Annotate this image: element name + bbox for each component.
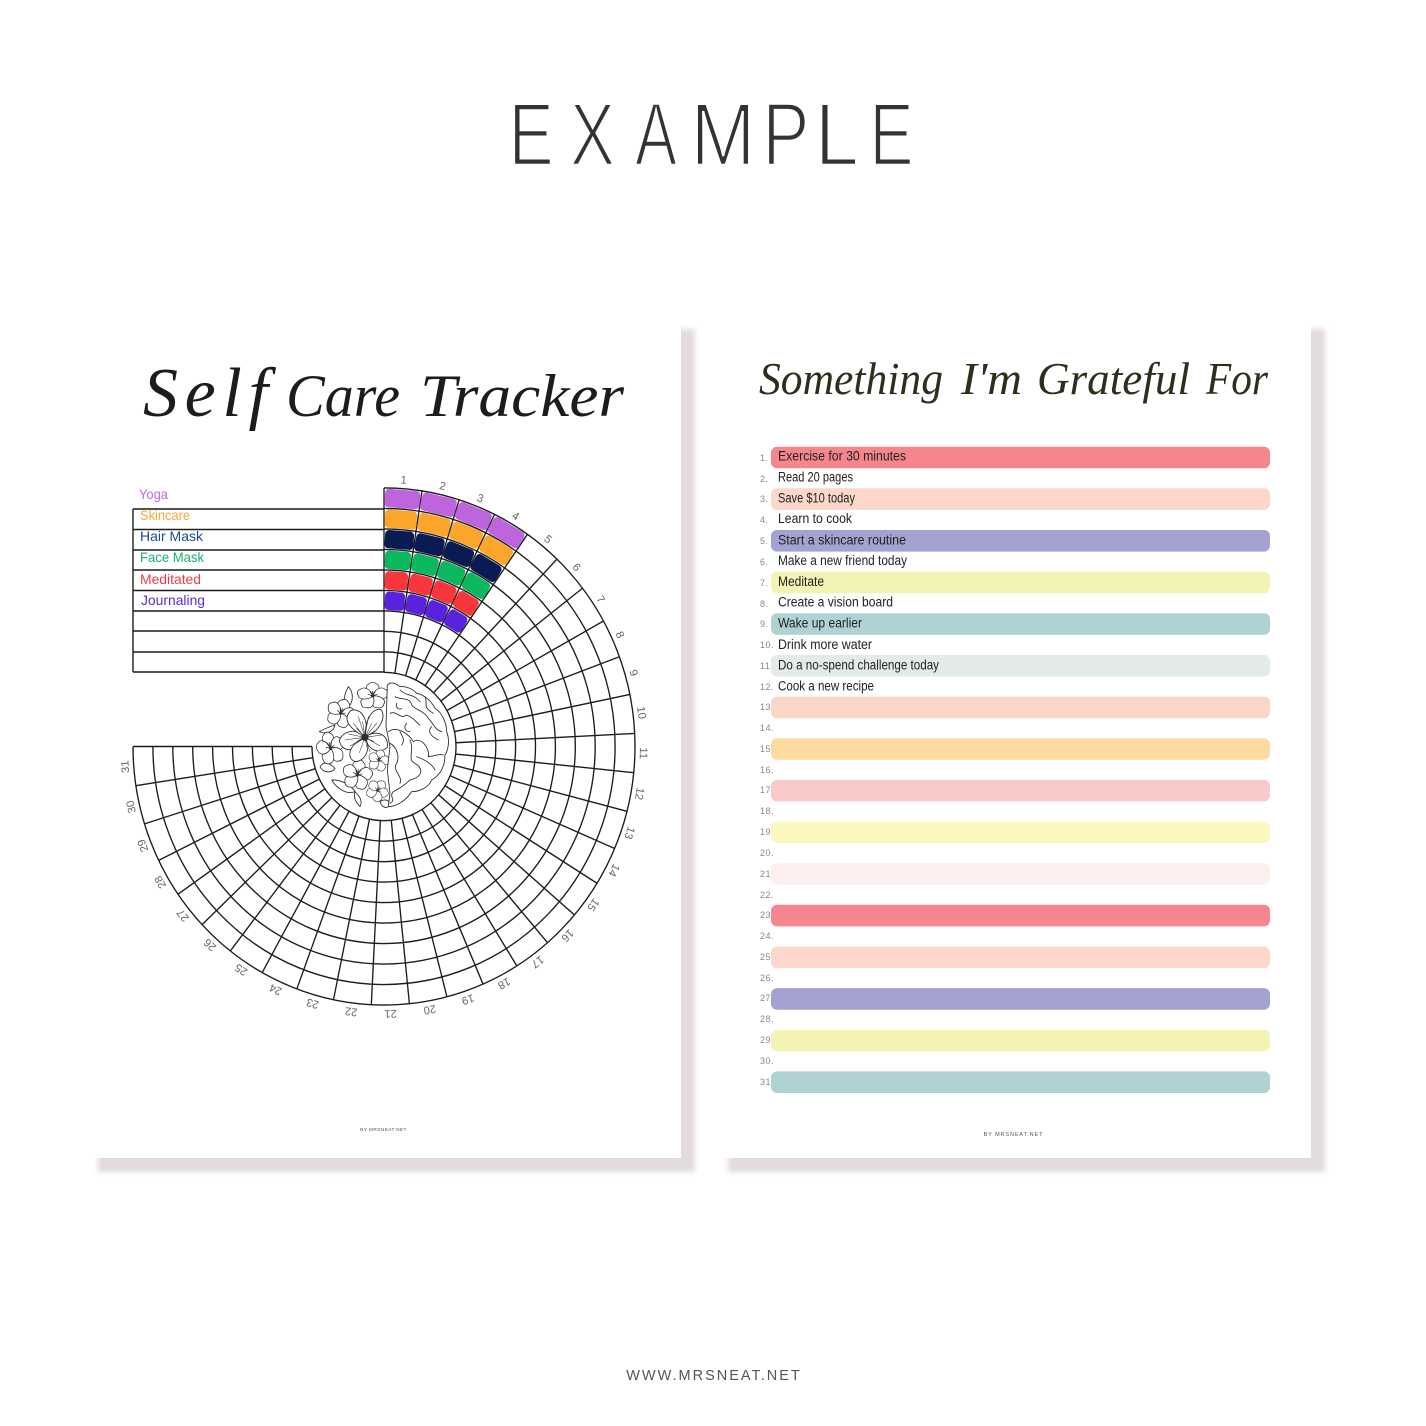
line numbers: 24. — [760, 931, 774, 941]
line numbers: 17. — [760, 785, 774, 795]
day numbers: 15 — [584, 896, 601, 913]
small flower near brain — [364, 747, 393, 775]
day numbers: 4 — [510, 510, 521, 523]
title: E — [509, 85, 554, 184]
list entries: Cook a new recipe — [778, 678, 874, 694]
line numbers: 8. — [760, 599, 769, 609]
list entries: Create a vision board — [778, 594, 893, 610]
day numbers: 31 — [119, 760, 132, 773]
panel: gratitude list page — [714, 315, 1311, 1158]
line numbers: 13. — [760, 702, 774, 712]
heading: self care tracker: Tracker — [420, 363, 625, 429]
day numbers: 20 — [423, 1002, 437, 1016]
day numbers: 5 — [542, 533, 554, 546]
list entries: Start a skincare routine — [778, 532, 906, 548]
footer website: WWW.MRSNEAT.NET — [626, 1368, 802, 1384]
day numbers: 26 — [202, 936, 219, 953]
list entries: Drink more water — [778, 637, 872, 652]
day numbers: 29 — [136, 837, 151, 854]
day numbers: 24 — [268, 981, 284, 997]
day numbers: 28 — [153, 873, 169, 890]
day spokes — [133, 488, 635, 1005]
day numbers: 14 — [605, 862, 622, 878]
day numbers: 18 — [496, 975, 512, 991]
list entries: Do a no-spend challenge today — [778, 658, 939, 672]
line numbers: 23. — [760, 910, 774, 920]
line numbers: 22. — [760, 890, 774, 900]
small flowers — [312, 682, 394, 807]
day numbers: 6 — [570, 561, 583, 574]
day numbers: 25 — [233, 961, 250, 978]
day numbers: 21 — [384, 1007, 397, 1019]
heading: self care tracker: Self — [143, 355, 277, 432]
day numbers: 19 — [460, 991, 475, 1007]
line numbers — [760, 453, 774, 1087]
coloured cells: yoga — [384, 489, 526, 550]
coloured cells: skincare — [384, 509, 514, 567]
line numbers: 2. — [760, 474, 769, 484]
heading: self care tracker — [143, 355, 625, 432]
day numbers: 2 — [438, 480, 447, 493]
day numbers — [119, 474, 649, 1019]
title: A — [635, 85, 677, 184]
line numbers: 27. — [760, 993, 774, 1003]
footer credit: BY MRSNEAT.NET — [360, 1127, 407, 1133]
day numbers: 22 — [344, 1004, 358, 1018]
line numbers: 10. — [760, 640, 774, 650]
line numbers: 21. — [760, 869, 774, 879]
line numbers: 1. — [760, 453, 769, 463]
day numbers: 9 — [626, 668, 639, 678]
panel: self care tracker page — [84, 315, 681, 1158]
line numbers: 15. — [760, 744, 774, 754]
title: P — [762, 85, 809, 184]
day numbers: 13 — [621, 825, 637, 841]
heading: self care tracker: Care — [286, 363, 400, 429]
coloured cells: journaling — [384, 591, 469, 634]
list entries: Learn to cook — [778, 511, 852, 526]
line numbers: 31. — [760, 1077, 774, 1087]
line numbers: 5. — [760, 536, 769, 546]
heading: something i'm grateful for — [759, 353, 1269, 404]
day numbers: 12 — [632, 786, 646, 801]
leaves — [319, 687, 390, 807]
line numbers: 25. — [760, 952, 774, 962]
table of habits — [133, 509, 384, 672]
list entries: Exercise for 30 minutes — [778, 448, 906, 464]
coloured cells: hair mask — [384, 530, 503, 583]
ring arcs — [133, 488, 635, 1005]
large flower — [339, 709, 388, 762]
line numbers: 29. — [760, 1035, 774, 1045]
habit labels: Hair Mask — [140, 528, 204, 544]
heading: something i'm grateful for: Grateful — [1037, 353, 1190, 404]
list entries: Wake up earlier — [778, 616, 862, 630]
footer credit: BY MRSNEAT.NET — [984, 1132, 1043, 1138]
habit labels: Skincare — [140, 507, 190, 523]
line numbers: 4. — [760, 515, 769, 525]
day numbers: 16 — [559, 926, 576, 944]
habit labels — [139, 486, 205, 608]
line numbers: 26. — [760, 973, 774, 983]
habit labels: Meditated — [140, 571, 201, 587]
line numbers: 28. — [760, 1014, 774, 1024]
line numbers: 18. — [760, 806, 774, 816]
day numbers: 1 — [400, 474, 407, 487]
day numbers: 30 — [125, 799, 139, 814]
title: E — [870, 85, 914, 184]
coloured cells: meditated — [384, 571, 480, 617]
habit labels: Yoga — [139, 486, 168, 502]
list entries: Meditate — [778, 574, 824, 589]
icon: floral brain illustration — [312, 682, 448, 807]
line numbers: 11. — [760, 661, 773, 671]
day numbers: 7 — [594, 594, 607, 606]
day numbers: 23 — [305, 995, 320, 1011]
brain half — [386, 683, 448, 807]
line numbers: 9. — [760, 619, 769, 629]
line numbers: 30. — [760, 1056, 774, 1066]
habit labels: Journaling — [141, 592, 205, 608]
title: L — [815, 85, 859, 184]
line numbers: 19. — [760, 827, 774, 837]
highlight bars — [771, 447, 1270, 1093]
heading: something i'm grateful for: For — [1205, 353, 1269, 404]
day numbers: 11 — [637, 747, 649, 759]
day numbers: 27 — [175, 906, 192, 924]
line numbers: 20. — [760, 848, 774, 858]
day numbers: 3 — [475, 492, 485, 506]
line numbers: 12. — [760, 682, 774, 692]
list entries — [778, 448, 939, 694]
coloured cells: face mask — [384, 550, 492, 600]
line numbers: 6. — [760, 557, 769, 567]
circular habit wheel — [119, 474, 649, 1019]
line numbers: 3. — [760, 494, 769, 504]
title: M — [690, 85, 756, 184]
list entries: Make a new friend today — [778, 553, 907, 568]
day numbers: 10 — [634, 706, 648, 720]
heading: something i'm grateful for: I'm — [960, 353, 1022, 404]
line numbers: 14. — [760, 723, 774, 733]
title: X — [570, 85, 615, 184]
list entries: Save $10 today — [778, 490, 855, 506]
flower centre — [345, 717, 382, 753]
day numbers: 17 — [529, 953, 546, 970]
line numbers: 16. — [760, 765, 774, 775]
heading: something i'm grateful for: Something — [759, 353, 943, 404]
line numbers: 7. — [760, 578, 769, 588]
day numbers: 8 — [613, 630, 626, 641]
list entries: Read 20 pages — [778, 470, 853, 484]
title — [509, 85, 914, 184]
habit labels: Face Mask — [140, 549, 205, 565]
